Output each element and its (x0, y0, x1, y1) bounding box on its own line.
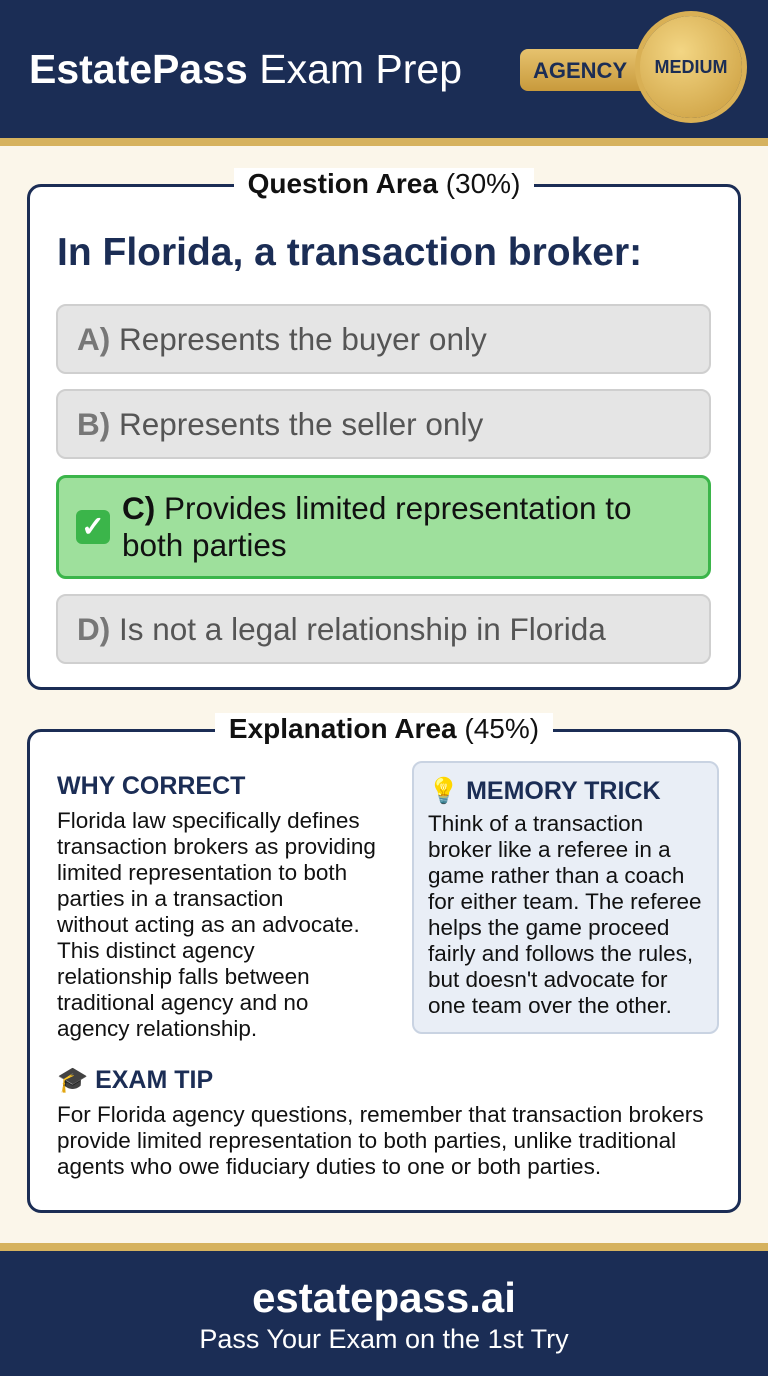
memory trick box: game rather than a coach (428, 863, 684, 888)
exam tip: agents who owe fiduciary duties to one or both parties. (57, 1154, 601, 1179)
option C correct: both parties (122, 527, 287, 563)
option B: B) Represents the seller only (77, 406, 483, 442)
icon: check: ✓ (81, 511, 105, 542)
badge: agency medium: MEDIUM (654, 57, 728, 77)
question: In Florida, a transaction broker: (57, 231, 642, 274)
footer (0, 1243, 768, 1376)
option C correct: C) Provides limited representation to (122, 490, 632, 526)
option A: A) Represents the buyer only (77, 320, 487, 356)
icon: check (76, 510, 110, 544)
why correct: traditional agency and no (57, 990, 308, 1015)
memory trick box: but doesn't advocate for (428, 967, 667, 992)
why correct: This distinct agency (57, 938, 255, 963)
header (0, 0, 768, 146)
footer tagline: Pass Your Exam on the 1st Try (199, 1324, 569, 1354)
legend: explanation area: Explanation Area (45%) (229, 713, 539, 744)
why correct: WHY CORRECT (57, 772, 245, 800)
panel: question area (27, 184, 741, 690)
option C correct (56, 475, 711, 579)
why correct: without acting as an advocate. (57, 912, 360, 937)
memory trick box: for either team. The referee (428, 889, 701, 914)
panel: explanation area (27, 729, 741, 1213)
memory trick box: one team over the other. (428, 993, 672, 1018)
memory trick box: broker like a referee in a (428, 837, 671, 862)
exam tip: provide limited representation to both parties, unlike traditional (57, 1128, 676, 1153)
badge: agency medium: AGENCY (533, 58, 627, 83)
memory trick box: Think of a transaction (428, 811, 643, 836)
why correct: parties in a transaction (57, 886, 283, 911)
exam tip: For Florida agency questions, remember that transaction brokers (57, 1102, 704, 1127)
badge: agency medium (520, 11, 747, 123)
footer site: estatepass.ai (252, 1274, 516, 1321)
why correct: agency relationship. (57, 1016, 257, 1041)
why correct: relationship falls between (57, 964, 310, 989)
option B (56, 389, 711, 459)
why correct: limited representation to both (57, 860, 347, 885)
option A (56, 304, 711, 374)
why correct: transaction brokers as providing (57, 834, 376, 859)
memory trick box: fairly and follows the rules, (428, 941, 693, 966)
exam tip (57, 1066, 704, 1179)
exam tip: 🎓 EXAM TIP (57, 1066, 213, 1094)
memory trick box: helps the game proceed (428, 915, 669, 940)
option D: D) Is not a legal relationship in Florida (77, 610, 606, 646)
memory trick box: 💡 MEMORY TRICK (428, 777, 661, 805)
legend: question area: Question Area (30%) (248, 168, 520, 199)
memory trick box (412, 761, 719, 1034)
option D (56, 594, 711, 664)
why correct: Florida law specifically defines (57, 808, 360, 833)
title: EstatePass Exam Prep (29, 46, 462, 92)
why correct (57, 772, 376, 1041)
